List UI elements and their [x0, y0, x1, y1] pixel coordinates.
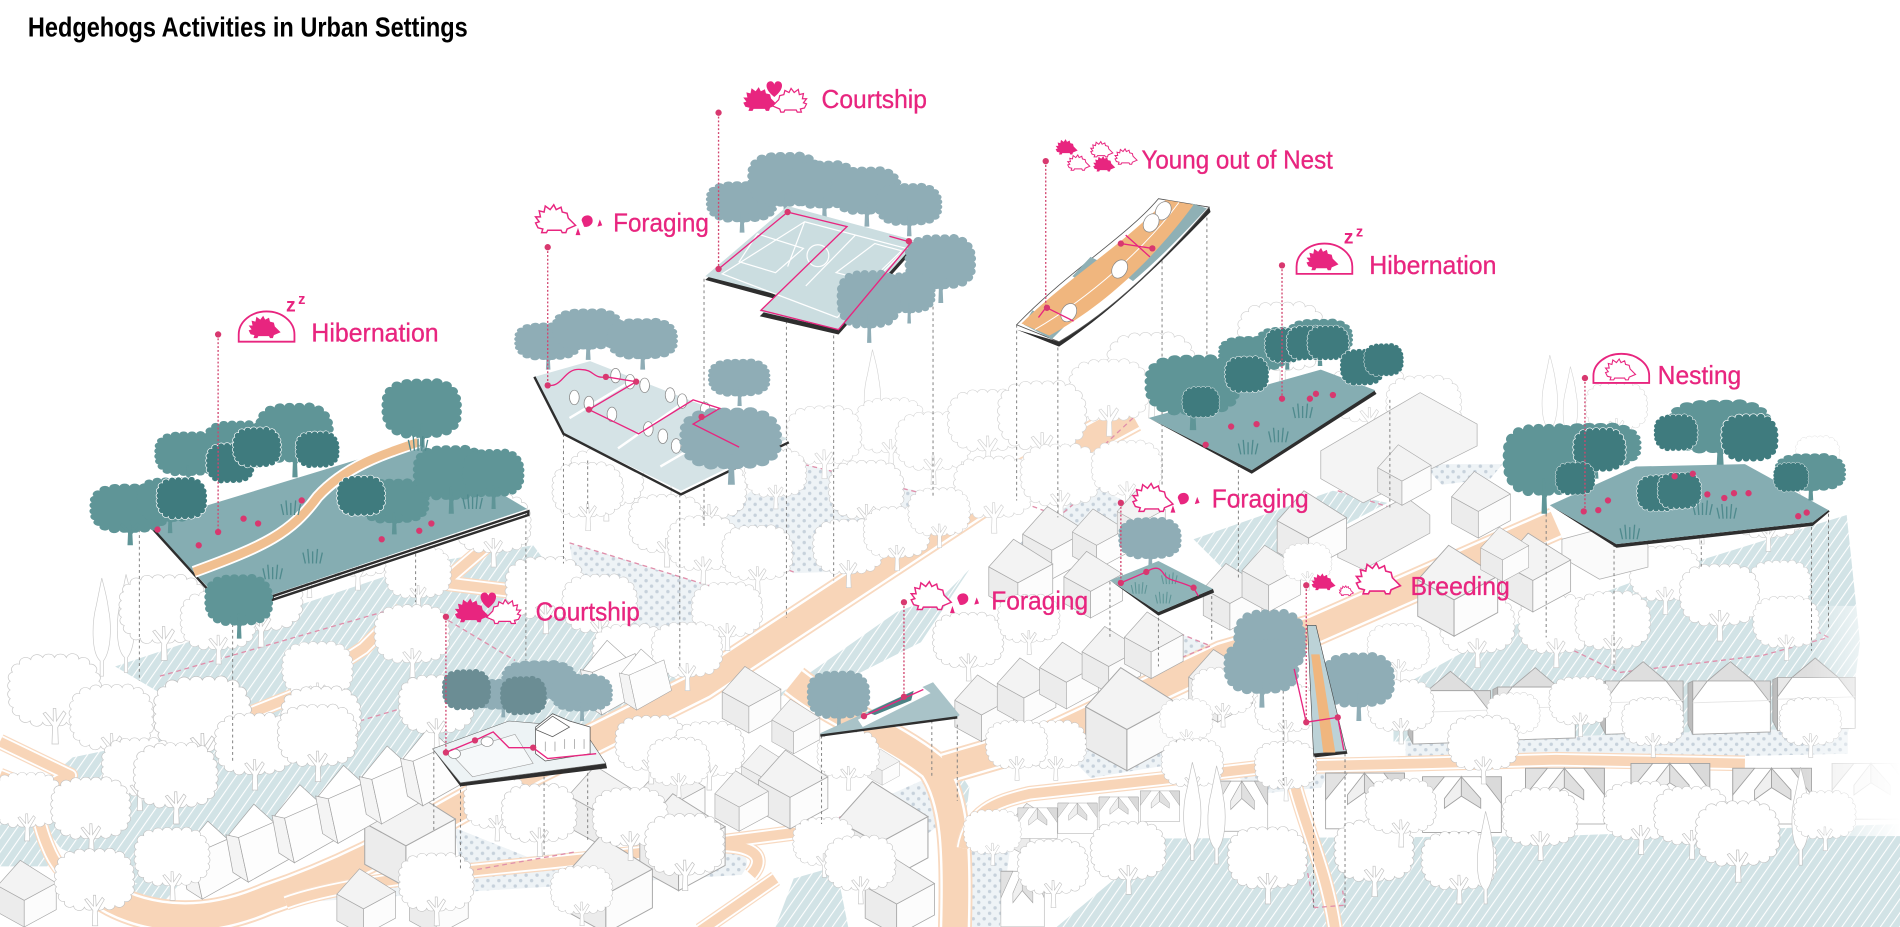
platform edge [534, 377, 789, 494]
tree [1118, 517, 1182, 570]
platform surface [1550, 464, 1829, 544]
icon: hedgehog in burrow [239, 292, 305, 342]
label text: Breeding [1410, 573, 1510, 601]
parked cars [570, 368, 710, 453]
label text: Foraging [1212, 486, 1309, 514]
hedgehog route [446, 732, 596, 759]
verge [1024, 204, 1207, 339]
shrubs [1182, 325, 1404, 418]
label text: Nesting [1658, 362, 1741, 390]
crossing arrows [1038, 235, 1152, 321]
shrubs [156, 427, 386, 520]
label text: Young out of Nest [1141, 146, 1333, 174]
pitch markings [722, 222, 906, 317]
platform surface [1110, 561, 1213, 612]
platform edge [1149, 390, 1377, 474]
platform edge [1550, 505, 1830, 548]
white trees: middle band [8, 448, 1820, 766]
strip of planting [858, 686, 931, 727]
label text: Hibernation [1369, 252, 1496, 280]
trees behind [1218, 319, 1353, 380]
platform surface [820, 682, 960, 736]
base map: hatched green areas [0, 491, 1900, 927]
trees [474, 660, 613, 721]
icon: hedgehog in burrow: z [1356, 224, 1363, 240]
label: foraging wedge [911, 582, 1088, 616]
hedgehog route [1121, 568, 1198, 596]
panel: foraging wedge platform [807, 670, 960, 736]
trees behind [514, 308, 678, 370]
grey dashed projection lines [139, 206, 1829, 908]
cars [448, 737, 493, 759]
platform surface [1307, 625, 1346, 754]
trees [1503, 423, 1846, 514]
icon: breeding hedgehogs [1312, 563, 1400, 596]
panel: football pitch platform [705, 152, 976, 343]
label: young out of nest [1056, 139, 1333, 174]
trees behind [706, 152, 942, 236]
roads [0, 416, 1745, 927]
pink dashed boundary lines [160, 418, 1829, 908]
lane surface [1311, 654, 1335, 753]
platform surface [148, 442, 527, 600]
shrubs [1555, 413, 1809, 512]
platform edge [1017, 207, 1211, 347]
houses: front-facing row east [1001, 658, 1900, 927]
title: Hedgehogs Activities in Urban Settings [28, 11, 468, 42]
grass tufts [1131, 572, 1177, 603]
trees behind [1548, 399, 1772, 479]
platform edge [148, 511, 528, 600]
grass tufts [1620, 500, 1736, 539]
grass tufts [263, 436, 482, 579]
hedgehog route [1294, 669, 1344, 750]
base map: dotted open-space areas [291, 460, 1848, 927]
icon: courting hedgehogs [743, 81, 807, 112]
platform edge [1110, 580, 1214, 616]
trees [679, 359, 782, 485]
panel: small foraging garden platform [1110, 517, 1214, 616]
platform edge [820, 717, 957, 736]
panel: hibernation park platform (west) [89, 378, 528, 639]
icon: hedgehog in burrow [1297, 224, 1363, 274]
hedgehog route [864, 689, 923, 716]
panel: breeding lane platform [1223, 609, 1395, 757]
trees in front [837, 234, 976, 343]
hedgehog route [548, 369, 739, 447]
platform edge [1314, 749, 1347, 757]
icon: hedgehog in burrow: z [286, 294, 296, 316]
platform surface [534, 361, 788, 491]
label text: Hibernation [311, 320, 439, 348]
houses: grey blocks [0, 445, 1571, 927]
label: hibernation east [1297, 224, 1496, 280]
path through park [194, 442, 418, 572]
platform surface [705, 206, 917, 330]
hedgehog route [719, 212, 911, 330]
pink location markers [154, 110, 1810, 756]
panel: courtship house-and-garden platform [433, 660, 613, 786]
lane line [1035, 202, 1179, 330]
panel: nesting woodland platform [1503, 399, 1846, 548]
trees [1223, 609, 1395, 721]
label: foraging small garden [1133, 483, 1309, 514]
carriageway [1021, 200, 1194, 336]
label: courtship garden [455, 593, 640, 626]
white trees: foreground [0, 543, 1856, 926]
icon: hedgehog and food [911, 582, 979, 613]
label text: Courtship [822, 86, 927, 114]
icon: hedgehog in burrow: z [298, 292, 305, 308]
platform surface [1017, 199, 1209, 342]
icon: young hedgehogs [1056, 139, 1137, 171]
trees behind platform [154, 378, 462, 487]
platform edge [433, 749, 607, 786]
icon: hedgehog and food [536, 205, 602, 235]
houses: terraced row south-west [180, 640, 672, 899]
parking bays [570, 382, 733, 467]
pink leader lines [218, 113, 1585, 753]
soft white fade at the east edge [1805, 606, 1900, 836]
icon: courting hedgehogs [455, 593, 521, 623]
label: foraging parking [536, 205, 709, 237]
tree in front [1145, 354, 1240, 430]
trees [89, 445, 524, 639]
house [536, 714, 590, 761]
panel: parking lot platform [514, 308, 789, 494]
lawn [451, 734, 533, 777]
label text: Courtship [536, 598, 640, 626]
grass tufts [1238, 404, 1312, 454]
long grey blocks behind the east platforms [1321, 393, 1648, 579]
label text: Foraging [613, 209, 709, 237]
panel: street segment platform (young out of nest) [1017, 199, 1211, 347]
platform surface [1149, 370, 1375, 470]
label: hibernation west [239, 292, 439, 348]
label: breeding [1312, 563, 1510, 601]
icon: hedgehog in burrow: z [1344, 227, 1354, 249]
platform edge [705, 211, 917, 334]
white background trees: upper band [786, 302, 1840, 533]
cars [1058, 199, 1174, 325]
tree [807, 670, 870, 731]
platform surface [433, 721, 606, 783]
label: courtship pitch [743, 81, 927, 114]
icon: hedgehog in nest [1593, 354, 1649, 383]
panel: hibernation woodland platform (east) [1145, 319, 1404, 474]
label text: Foraging [991, 588, 1088, 616]
icon: hedgehog and food [1133, 483, 1200, 513]
label: nesting [1593, 354, 1741, 390]
